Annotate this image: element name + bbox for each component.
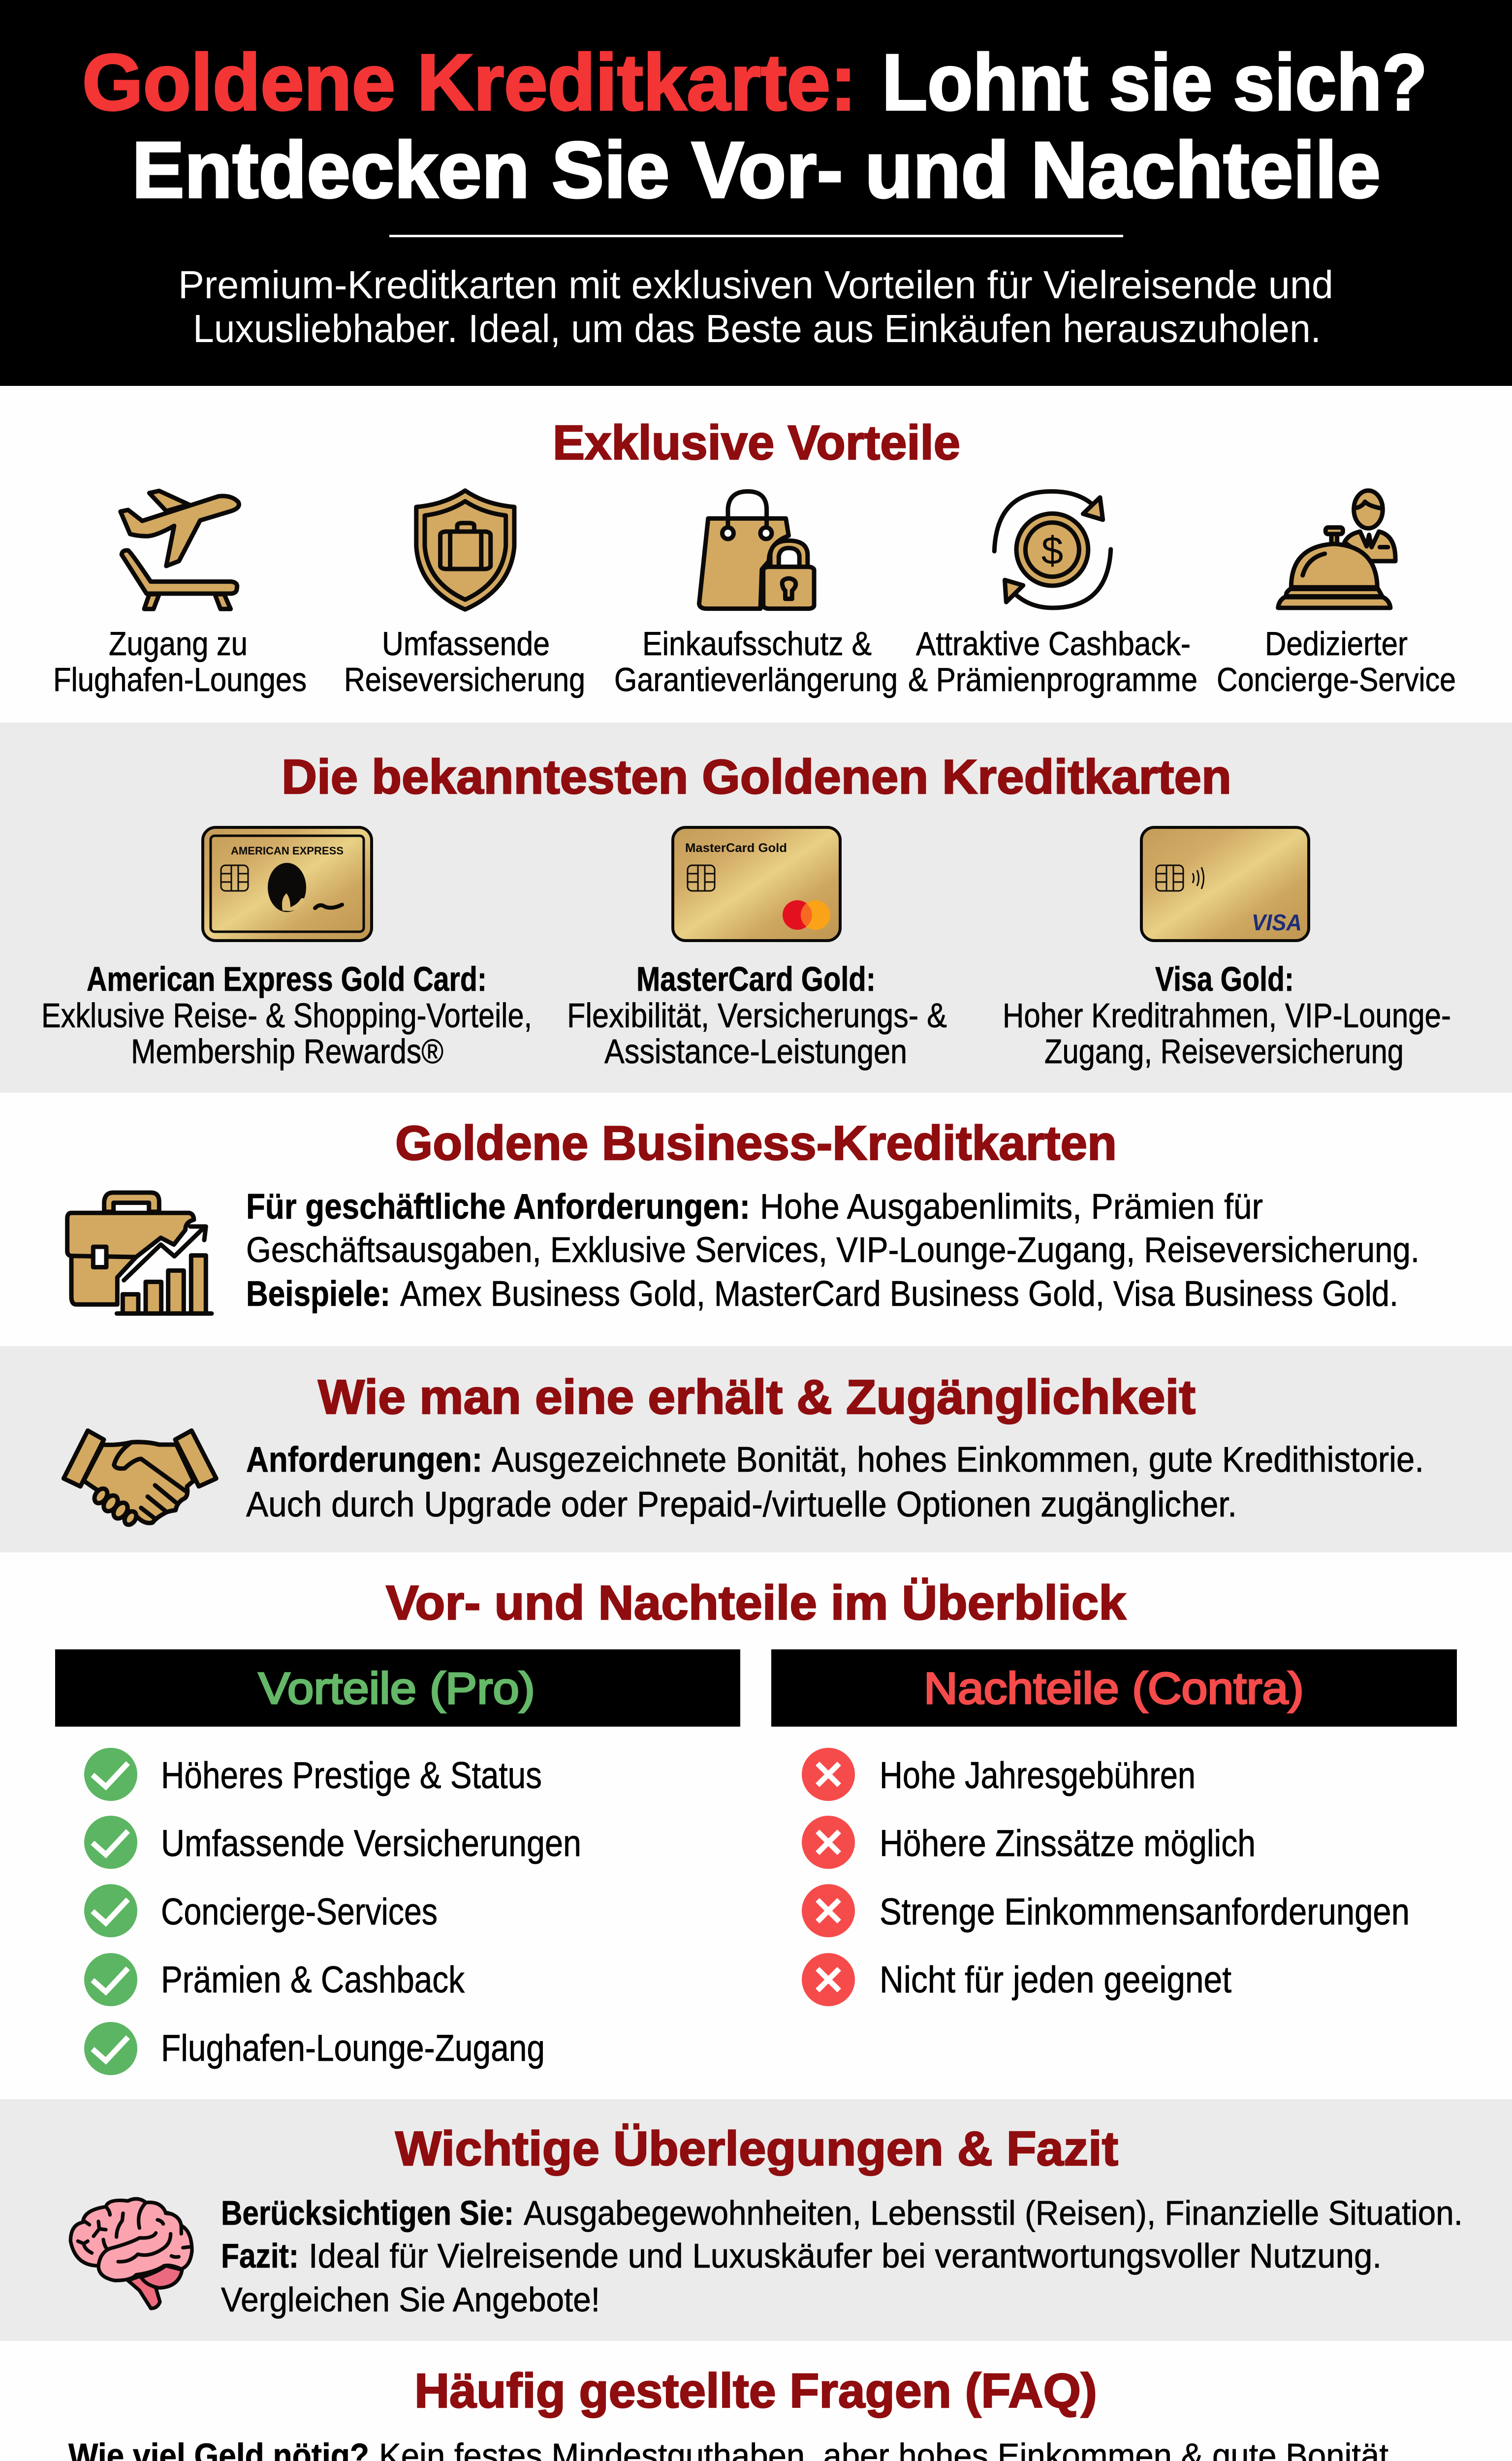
pro item 1 bbox=[84, 1748, 542, 1801]
contra item 1 bbox=[802, 1748, 1196, 1801]
contra item 3: Strenge Einkommensanforderungen bbox=[880, 1891, 1410, 1933]
contra item 4: Nicht für jeden geeignet bbox=[880, 1959, 1231, 2001]
label: cashback bbox=[908, 625, 1197, 698]
text block: conclusion: Ideal für Vielreisende und Luxuskäufer bei verantwortungsvoller Nutzung. bbox=[309, 2237, 1382, 2275]
text block: requirements: Auch durch Upgrade oder Prepaid-/virtuelle Optionen zugänglicher. bbox=[246, 1485, 1237, 1524]
title: Entdecken Sie Vor- und Nachteile bbox=[132, 126, 1381, 215]
heading: Die bekanntesten Goldenen Kreditkarten bbox=[282, 750, 1231, 804]
text block: business: Hohe Ausgabenlimits, Prämien für bbox=[760, 1187, 1263, 1227]
label: cashback: & Prämienprogramme bbox=[908, 661, 1197, 698]
pro item 2: Umfassende Versicherungen bbox=[161, 1823, 581, 1864]
text: MasterCard: MasterCard Gold: bbox=[636, 960, 876, 998]
heading: Exklusive Vorteile bbox=[553, 415, 960, 470]
label: insurance: Umfassende bbox=[382, 625, 550, 663]
text block: business bbox=[246, 1187, 1419, 1314]
text block: conclusion: Ausgabegewohnheiten, Lebensstil (Reisen), Finanzielle Situation. bbox=[524, 2194, 1463, 2232]
pro item 4: Prämien & Cashback bbox=[161, 1959, 465, 2001]
card: American Express bbox=[203, 827, 372, 941]
label: purchase protection: Garantieverlängerung bbox=[614, 661, 898, 698]
pro item 1: Höheres Prestige & Status bbox=[161, 1755, 542, 1797]
text: MasterCard: Assistance-Leistungen bbox=[604, 1032, 907, 1071]
pro item 3 bbox=[84, 1884, 438, 1937]
pro item 5: Flughafen-Lounge-Zugang bbox=[161, 2027, 545, 2069]
column header: Vorteile bbox=[55, 1649, 740, 1727]
card: MasterCard bbox=[673, 827, 840, 941]
text: Visa: Zugang, Reiseversicherung bbox=[1044, 1032, 1404, 1071]
label: purchase protection bbox=[614, 625, 898, 698]
title bbox=[82, 38, 1427, 215]
text: Visa: Visa Gold: bbox=[1155, 960, 1294, 998]
text: American Express: Membership Rewards® bbox=[131, 1032, 443, 1071]
text block: conclusion: Vergleichen Sie Angebote! bbox=[221, 2280, 600, 2319]
title: Goldene Kreditkarte: bbox=[82, 38, 856, 127]
text: American Express: American Express Gold Card: bbox=[87, 960, 487, 998]
subtitle: Luxusliebhaber. Ideal, um das Beste aus Einkäufen herauszuholen. bbox=[193, 307, 1321, 350]
label: lounges bbox=[53, 625, 307, 698]
panel: Überlegungen und Fazit bbox=[0, 2099, 1512, 2341]
icon: cashback coin bbox=[994, 491, 1111, 608]
card: Visa bbox=[1141, 827, 1309, 941]
icon: brain bbox=[70, 2199, 192, 2308]
panel: Business-Kreditkarten bbox=[0, 1093, 1512, 1346]
icon: shopping bag with lock bbox=[699, 491, 814, 609]
text block: conclusion: Fazit: bbox=[221, 2237, 299, 2275]
panel: exklusive Vorteile bbox=[0, 386, 1512, 723]
contra item 4 bbox=[802, 1953, 1231, 2006]
panel: Vor- und Nachteile bbox=[0, 1552, 1512, 2099]
text: Visa bbox=[1003, 960, 1451, 1071]
text block: requirements bbox=[246, 1440, 1424, 1524]
text: American Express bbox=[41, 960, 532, 1071]
text: Visa: Hoher Kreditrahmen, VIP-Lounge- bbox=[1003, 996, 1451, 1035]
text block: conclusion: Berücksichtigen Sie: bbox=[221, 2194, 514, 2232]
text block: business: Amex Business Gold, MasterCard Business Gold, Visa Business Gold. bbox=[400, 1274, 1398, 1314]
text block: business: Für geschäftliche Anforderungen: bbox=[246, 1187, 750, 1227]
label: lounges: Flughafen-Lounges bbox=[53, 661, 307, 698]
icon: cashback coin: $ bbox=[1041, 529, 1063, 572]
icon: briefcase with chart bbox=[67, 1193, 212, 1314]
card: MasterCard: MasterCard Gold bbox=[685, 841, 787, 855]
text: American Express: Exklusive Reise- & Shopping-Vorteile, bbox=[41, 996, 532, 1035]
label: concierge bbox=[1217, 625, 1456, 698]
contra item 2: Höhere Zinssätze möglich bbox=[880, 1823, 1256, 1864]
heading: Wie man eine erhält & Zugänglichkeit bbox=[318, 1370, 1196, 1424]
label: purchase protection: Einkaufsschutz & bbox=[642, 625, 872, 663]
contra item 2 bbox=[802, 1816, 1256, 1869]
icon: concierge bell bbox=[1278, 491, 1395, 608]
heading: Goldene Business-Kreditkarten bbox=[395, 1116, 1117, 1170]
card: American Express: AMERICAN EXPRESS bbox=[231, 845, 344, 857]
icon: shield with suitcase bbox=[416, 491, 514, 609]
contra item 3 bbox=[802, 1884, 1410, 1937]
card: Visa: VISA bbox=[1252, 910, 1302, 935]
subtitle: Premium-Kreditkarten mit exklusiven Vorteilen für Vielreisende und bbox=[178, 263, 1333, 307]
pro item 5 bbox=[84, 2022, 545, 2075]
text block: requirements: Anforderungen: bbox=[246, 1440, 482, 1480]
label: concierge: Dedizierter bbox=[1265, 625, 1408, 663]
pro item 3: Concierge-Services bbox=[161, 1891, 438, 1933]
text: MasterCard: Flexibilität, Versicherungs- & bbox=[567, 996, 947, 1035]
column header: Vorteile: Vorteile (Pro) bbox=[258, 1664, 535, 1713]
panel: FAQ bbox=[0, 2341, 1512, 2461]
subtitle bbox=[178, 263, 1333, 350]
text block: business: Geschäftsausgaben, Exklusive Services, VIP-Lounge-Zugang, Reiseversicherung. bbox=[246, 1230, 1419, 1270]
label: lounges: Zugang zu bbox=[109, 625, 248, 663]
column header: Nachteile bbox=[771, 1649, 1457, 1727]
icon: handshake bbox=[63, 1430, 216, 1527]
text: MasterCard bbox=[567, 960, 947, 1071]
text block: business: Beispiele: bbox=[246, 1274, 390, 1314]
text block: requirements: Ausgezeichnete Bonität, hohes Einkommen, gute Kredithistorie. bbox=[492, 1440, 1424, 1480]
heading: Wichtige Überlegungen & Fazit bbox=[395, 2121, 1118, 2176]
heading: Häufig gestellte Fragen (FAQ) bbox=[414, 2364, 1097, 2418]
contra item 1: Hohe Jahresgebühren bbox=[880, 1755, 1196, 1797]
pro item 2 bbox=[84, 1816, 581, 1869]
label: concierge: Concierge-Service bbox=[1217, 661, 1456, 698]
panel: Zugänglichkeit bbox=[0, 1346, 1512, 1552]
panel: bekannteste Karten bbox=[0, 723, 1512, 1093]
label: insurance bbox=[344, 625, 585, 698]
title: Lohnt sie sich? bbox=[882, 38, 1427, 127]
column header: Nachteile: Nachteile (Contra) bbox=[924, 1664, 1304, 1713]
panel: header bbox=[0, 0, 1512, 386]
label: cashback: Attraktive Cashback- bbox=[916, 625, 1191, 663]
icon: plane and lounger bbox=[121, 491, 239, 609]
label: insurance: Reiseversicherung bbox=[344, 661, 585, 698]
heading: Vor- und Nachteile im Überblick bbox=[386, 1576, 1126, 1630]
pro item 4 bbox=[84, 1953, 465, 2006]
text block: conclusion bbox=[221, 2194, 1463, 2319]
